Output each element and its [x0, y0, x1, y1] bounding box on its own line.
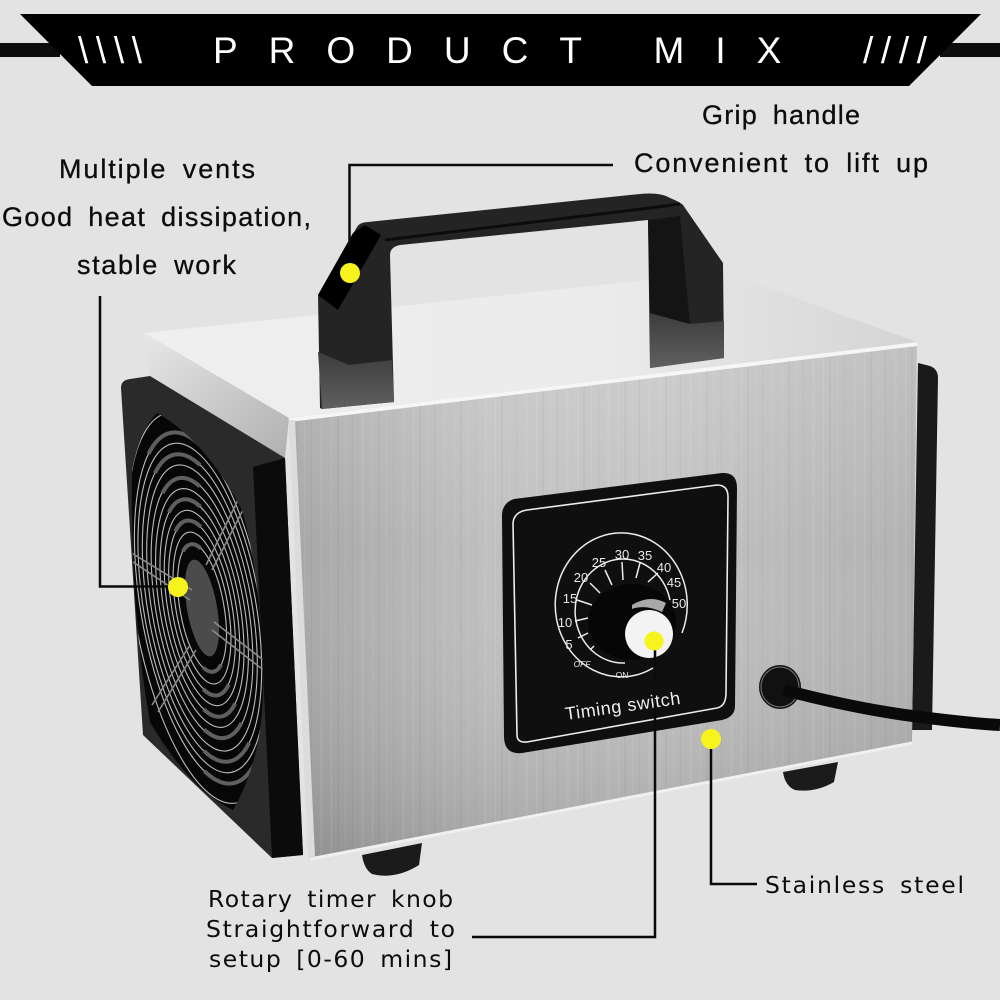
title text: PRODUCT MIX	[213, 30, 812, 71]
callout: grip handle: Grip handle	[702, 100, 860, 130]
banner slashes left: \\\\	[78, 30, 143, 71]
callout: multiple vents	[2, 154, 311, 280]
rear black panel	[912, 363, 938, 730]
yellow marker dots	[168, 263, 721, 749]
banner slashes right: ////	[863, 30, 928, 71]
leader lines	[100, 165, 757, 937]
timing switch label: Timing switch	[564, 688, 681, 724]
dial numbers: 30	[615, 547, 629, 562]
ozone generator device	[101, 194, 1000, 876]
top plate	[144, 272, 917, 418]
callout: grip handle: Convenient to lift up	[634, 148, 928, 178]
power cord	[759, 665, 1000, 725]
front steel face	[289, 342, 917, 859]
dial numbers: 20	[574, 570, 588, 585]
dial numbers: 45	[667, 575, 681, 590]
knob	[588, 584, 676, 660]
callout: multiple vents: Good heat dissipation,	[2, 202, 311, 232]
dial numbers	[558, 547, 686, 680]
dial numbers: 35	[638, 548, 652, 563]
callout: stainless steel: Stainless steel	[765, 871, 964, 899]
dial numbers: 25	[592, 555, 606, 570]
dial numbers: 10	[558, 615, 572, 630]
dial numbers: 40	[657, 560, 671, 575]
callout: rotary timer knob: Rotary timer knob	[208, 885, 453, 913]
handle	[318, 194, 724, 409]
dial numbers: ON	[616, 670, 628, 680]
dial rings and ticks	[555, 533, 687, 677]
callout: rotary timer knob: Straightforward to	[206, 915, 455, 943]
title banner	[0, 14, 1000, 86]
feet	[362, 762, 838, 876]
dial numbers: 50	[672, 596, 686, 611]
side lip	[144, 333, 289, 458]
dial numbers: OFF	[574, 659, 591, 669]
callout: multiple vents: Multiple vents	[59, 154, 255, 184]
dial numbers: 5	[565, 637, 573, 652]
callout: grip handle	[634, 100, 928, 178]
dial numbers: 15	[563, 591, 577, 606]
callout: rotary timer knob: setup [0-60 mins]	[209, 945, 452, 973]
callout: multiple vents: stable work	[77, 250, 236, 280]
timer panel	[502, 473, 737, 753]
fan housing	[121, 376, 303, 858]
callout: rotary timer knob	[206, 885, 455, 973]
